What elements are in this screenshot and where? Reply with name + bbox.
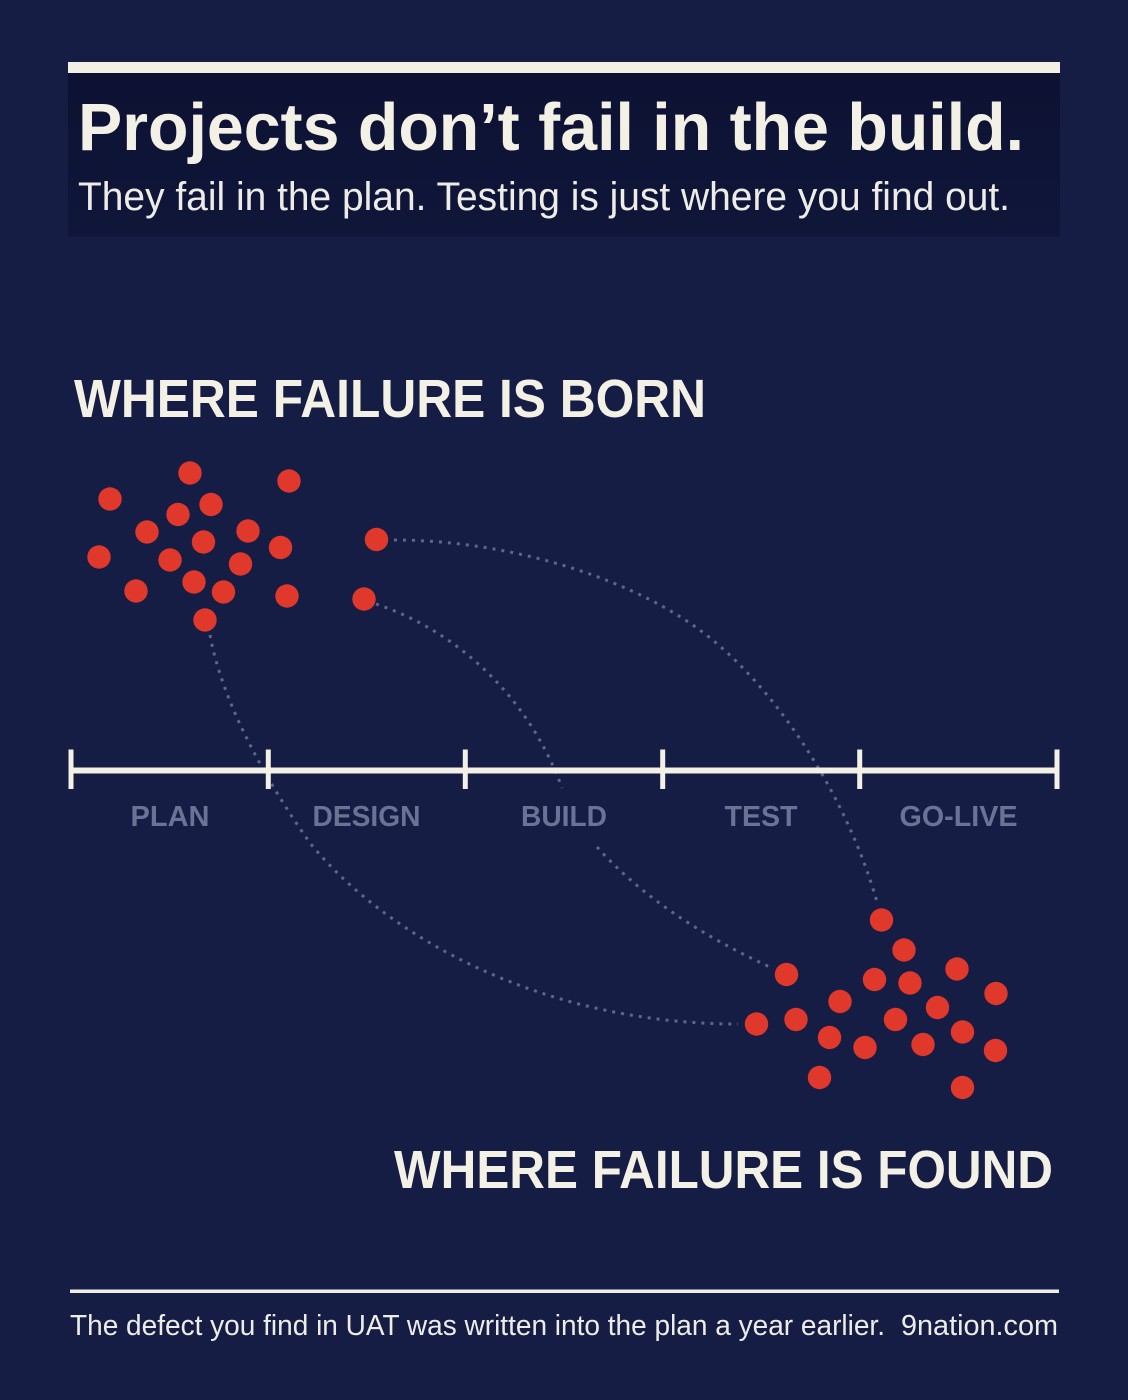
footer	[70, 1290, 1059, 1342]
red dots: defects born in plan and design	[87, 461, 388, 632]
timeline phase labels: GO-LIVE	[900, 801, 1018, 833]
red dots: defects found in test and go-live	[745, 908, 1008, 1099]
timeline phase labels: PLAN	[130, 801, 210, 833]
timeline	[71, 750, 1058, 789]
heading: where failure is born: WHERE FAILURE IS BORN	[74, 369, 706, 429]
title block	[68, 62, 1060, 236]
subtitle: They fail in the plan. Testing is just where you find out.	[78, 175, 1010, 219]
timeline phase labels	[130, 801, 1018, 833]
timeline phase labels: TEST	[724, 801, 798, 833]
dotted connector arcs	[210, 540, 877, 1024]
heading: where failure is found: WHERE FAILURE IS FOUND	[394, 1140, 1053, 1200]
title: Projects don’t fail in the build.	[78, 91, 1024, 165]
footer note: The defect you find in UAT was written into the plan a year earlier.	[70, 1310, 885, 1342]
timeline phase labels: BUILD	[521, 801, 607, 833]
timeline phase labels: DESIGN	[312, 801, 420, 833]
footer site: 9nation.com	[901, 1310, 1058, 1342]
